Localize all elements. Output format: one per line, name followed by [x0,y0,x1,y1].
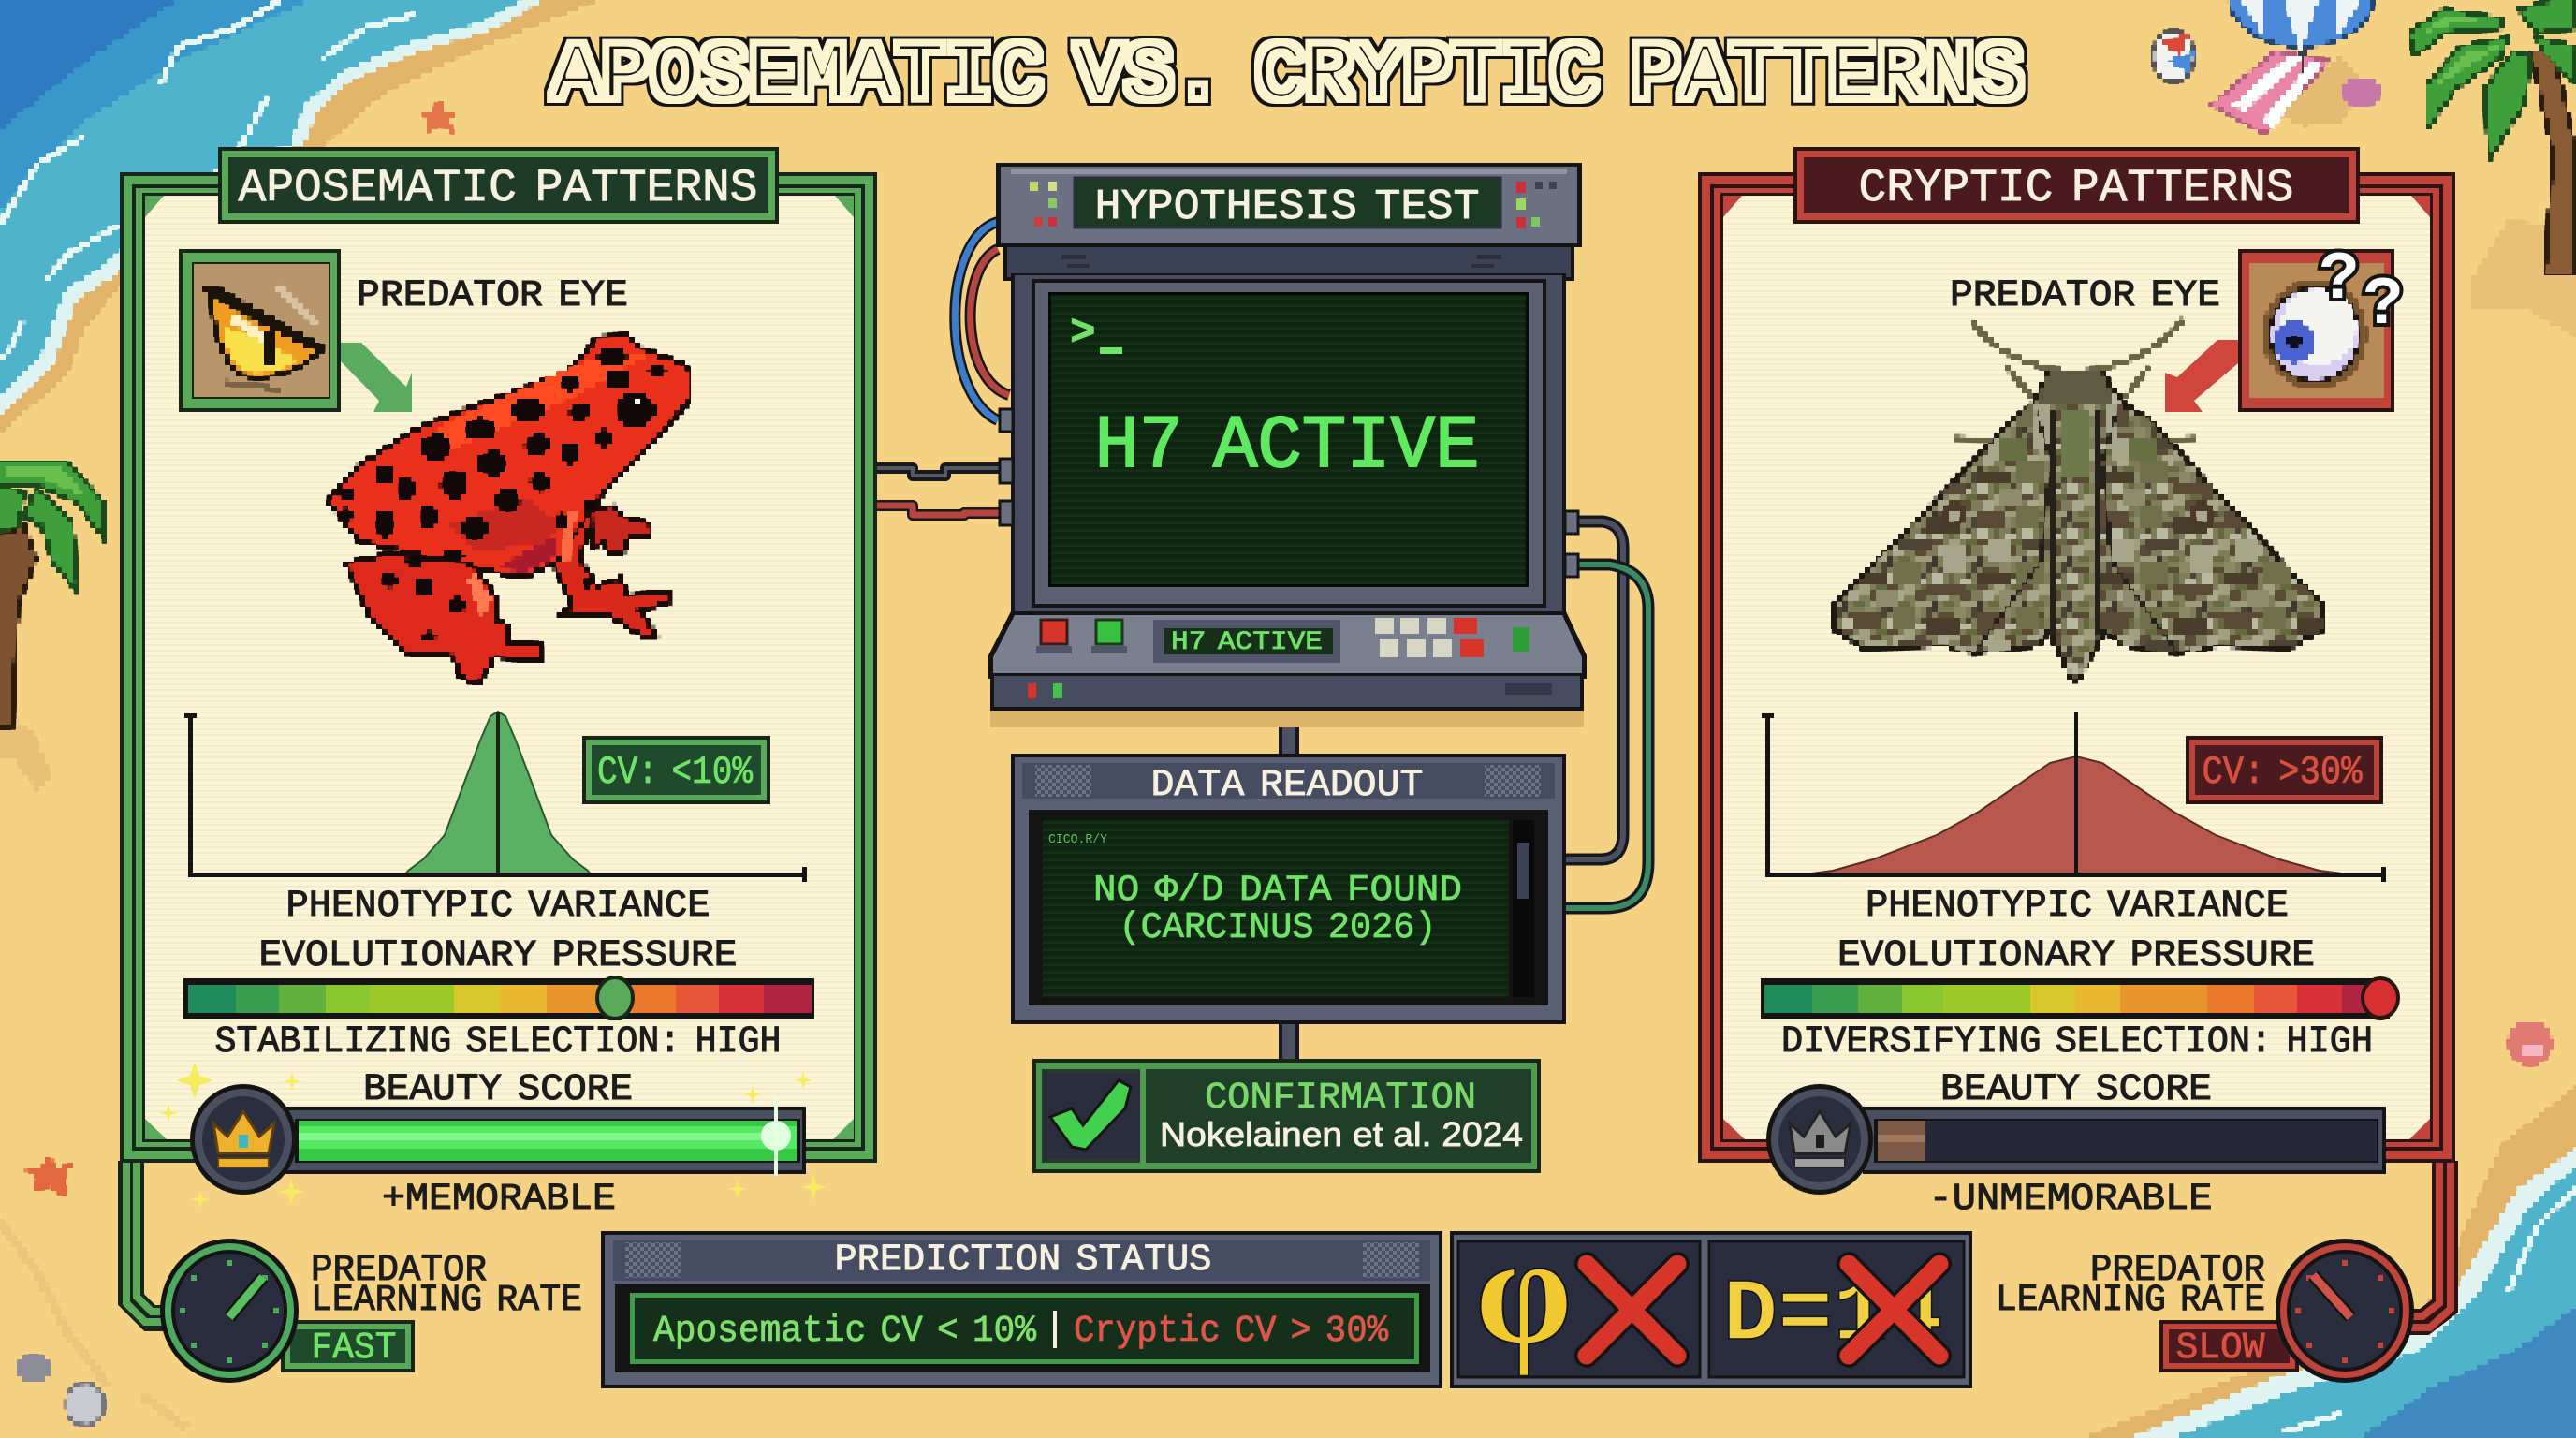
panel: data readout [1011,754,1566,1024]
wires: left panel to monitor [877,468,1001,515]
beauty bar: full [285,1097,806,1176]
badge: CV under 10 percent: CV: <10% [597,750,754,795]
label: diversifying selection: DIVERSIFYING SELECTION: HIGH [1781,1021,2373,1064]
gauge bar: evolutionary pressure [183,977,814,1019]
label: memorable: +MEMORABLE [382,1179,616,1221]
extension frame to slow gauge [2406,1161,2451,1328]
panel heading [1793,147,2360,224]
text: confirmation: Nokelainen et al. 2024 [1160,1115,1523,1153]
wire plugs [1000,409,1578,577]
cell: D value: D=14 [1722,1267,1943,1366]
panel: hypothesis test monitor [988,163,1587,727]
beauty bar: nearly empty [1863,1107,2386,1174]
label: stabilizing selection: STABILIZING SELECTION: HIGH [215,1021,781,1064]
icon: camouflaged moth [1835,319,2322,680]
panel: prediction status: PREDICTION STATUS [835,1240,1211,1282]
gauge bar: evolutionary pressure [1761,978,2398,1019]
icon: right palm tree [2409,0,2576,274]
label: predator learning rate right [1996,1250,2265,1322]
monitor body and screen: H7 ACTIVE [1095,404,1479,490]
ocean: bottom right [2084,1087,2576,1438]
panel: cryptic patterns [1698,147,2455,1328]
panel: prediction status [601,1231,1442,1388]
panel heading [218,147,779,224]
readout screen: NO Φ/D DATA FOUND [1093,870,1462,911]
control deck [988,611,1587,679]
connector stems [1281,709,1297,1061]
panel frame [120,172,877,1163]
monitor head: HYPOTHESIS TEST [1095,183,1479,231]
arrow: eye to frog [341,343,412,412]
icon: pink shell top [2343,77,2380,107]
icon: check mark [1050,1080,1131,1150]
cell: phi: φ [1475,1203,1573,1377]
icon: starfish bottom [22,1153,73,1200]
icon: left palm tree [0,462,105,726]
panel: aposematic patterns [120,147,877,1322]
monitor head [996,163,1582,281]
icon: beach umbrella and towel [2212,0,2374,133]
label: predator learning rate left: PREDATOR [311,1250,487,1292]
icon: red poison frog [329,335,690,684]
icon: confused predator eye [2238,242,2404,412]
text: confirmation [1160,1078,1523,1153]
gauge: slow learning [2159,1239,2414,1383]
label: predator eye: PREDATOR EYE [357,275,628,317]
icon: pink shell right [2508,1020,2553,1065]
tag: slow: SLOW [2175,1328,2265,1370]
monitor shadow [990,709,1584,727]
panel heading: APOSEMATIC PATTERNS [238,162,758,214]
readout screen: (CARCINUS 2026) [1120,907,1436,948]
ocean: top left [0,0,599,433]
control deck: H7 ACTIVE [1171,628,1323,657]
icon: gold crown badge [190,1084,297,1195]
label: evolutionary pressure: EVOLUTIONARY PRESSURE [258,935,738,977]
status screen: Aposematic CV < 10% [653,1311,1037,1353]
panel: rejected metrics [1450,1203,1972,1388]
readout screen [1029,810,1548,1005]
panel: confirmation [1032,1059,1541,1173]
label: phenotypic variance: PHENOTYPIC VARIANCE [1866,886,2289,928]
icon: confused predator eye: ? [2319,242,2360,318]
label: predator eye: PREDATOR EYE [1950,275,2220,317]
chart: wide phenotypic variance curve [1762,712,2386,882]
icon: grey crown badge [1766,1084,1873,1195]
readout screen: CICO.R/Y [1048,832,1108,847]
icon: predator eye [179,249,341,412]
status screen: Cryptic CV > 30% [1074,1311,1389,1353]
label: phenotypic variance: PHENOTYPIC VARIANCE [286,886,710,928]
gauge: fast learning [160,1239,415,1383]
icon: confused predator eye: ? [2363,267,2404,344]
icon: pebbles [17,1355,104,1425]
panel heading: CRYPTIC PATTERNS [1859,162,2293,214]
tag: slow [2159,1320,2299,1372]
monitor body and screen [1011,273,1566,615]
status screen [615,1284,1430,1372]
text: confirmation: CONFIRMATION [1205,1078,1476,1120]
label: predator learning rate right: PREDATOR [2090,1250,2265,1292]
label: unmemorable: -UNMEMORABLE [1928,1179,2213,1221]
base plate [990,673,1584,711]
badge: CV over 30 percent: CV: >30% [2202,750,2363,795]
label: predator learning rate left [311,1250,582,1322]
cell: phi [1458,1203,1700,1377]
cell: D value [1709,1241,1964,1377]
sparkles [159,1062,827,1209]
label: evolutionary pressure: EVOLUTIONARY PRESSURE [1837,935,2315,977]
arrow: eye to moth [2165,340,2238,412]
label: beauty score: BEAUTY SCORE [363,1069,633,1111]
monitor body and screen: > [1070,309,1096,358]
wires: monitor to data readout [1566,521,1648,908]
label: predator learning rate right: LEARNING RATE [1996,1280,2265,1322]
panel frame [1698,172,2455,1163]
extension frame to fast gauge [126,1161,168,1322]
panel: data readout: DATA READOUT [1151,765,1423,807]
wires: monitor side loops [955,222,1009,420]
icon: beach ball [2153,31,2194,81]
chart: narrow phenotypic variance curve [184,712,807,882]
tag: fast: FAST [311,1328,397,1370]
tag: fast [281,1320,415,1372]
badge: CV over 30 percent [2186,736,2383,804]
label: beauty score: BEAUTY SCORE [1940,1069,2212,1111]
label: predator learning rate left: LEARNING RATE [311,1280,582,1322]
badge: CV under 10 percent [582,736,770,804]
title: APOSEMATIC VS. CRYPTIC PATTERNS [552,31,2024,122]
icon: starfish top [419,98,459,133]
